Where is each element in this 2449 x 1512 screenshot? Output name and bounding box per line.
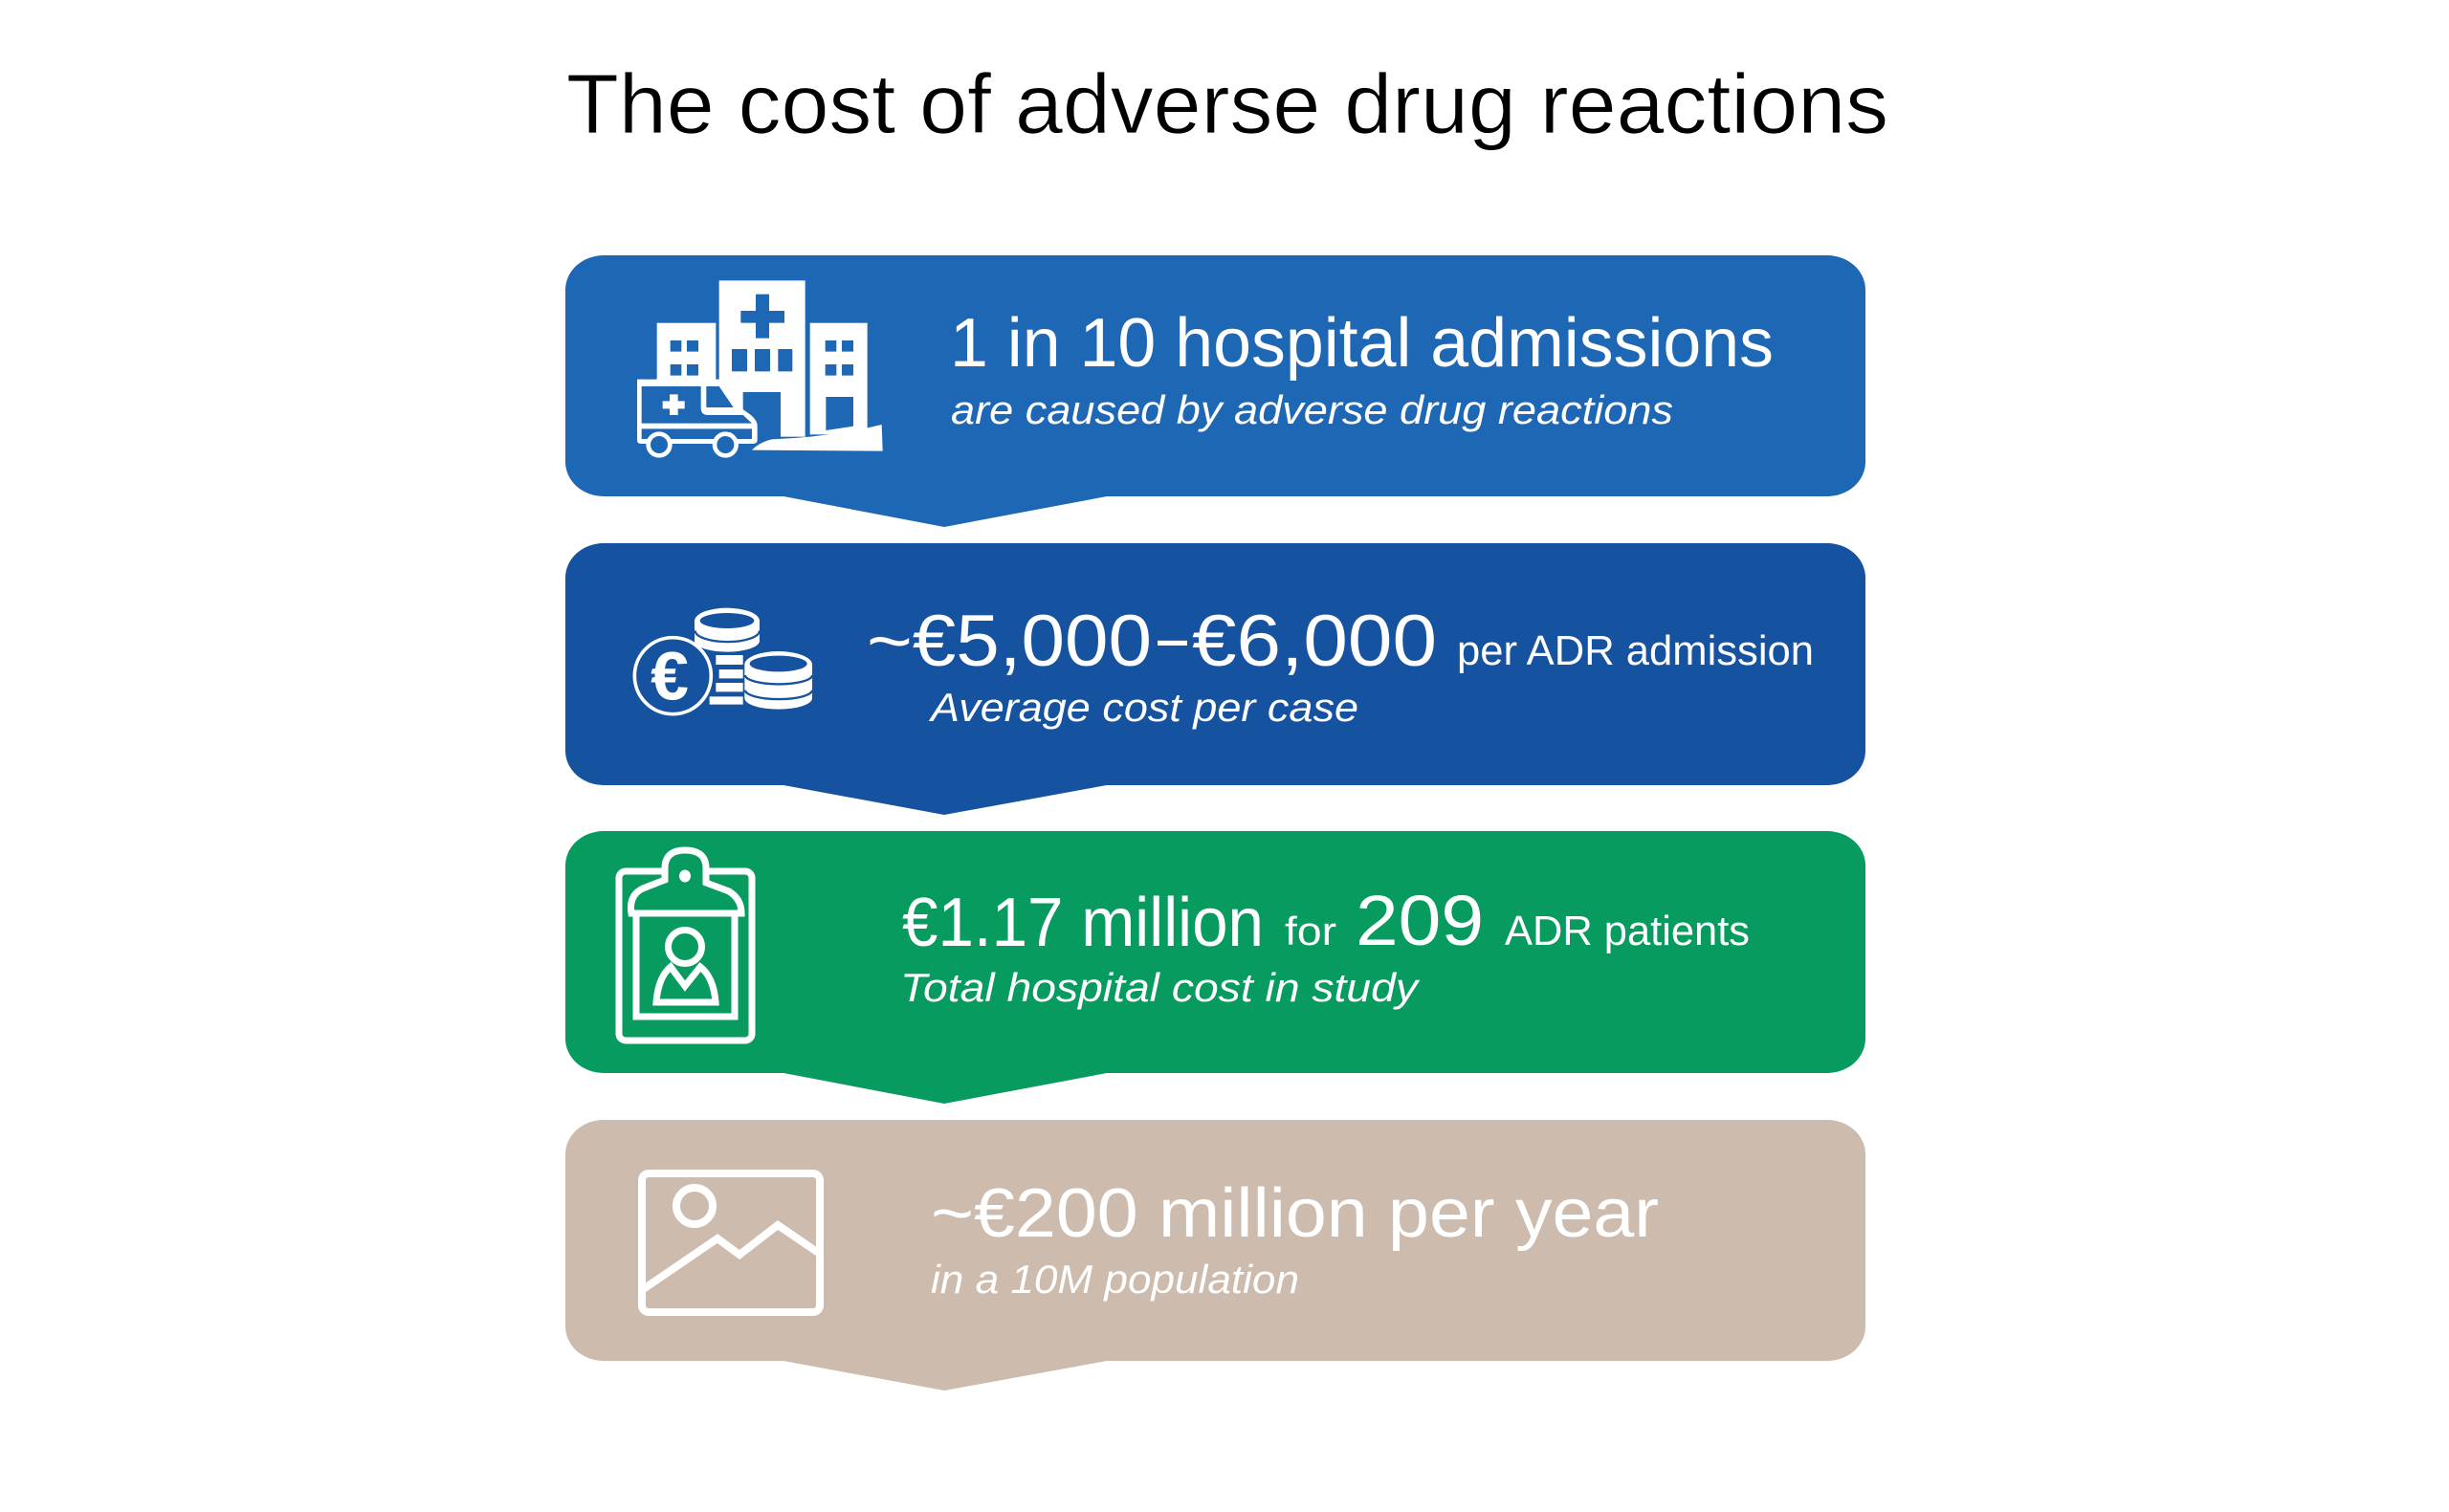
- card shape tan: [565, 1120, 1865, 1391]
- headline: ~€5,000: [867, 601, 1152, 682]
- panel: annual population cost: [565, 1120, 1865, 1391]
- card shape dark blue: [565, 543, 1865, 815]
- connector word: for: [1285, 909, 1336, 953]
- headline unit: per ADR admission: [1457, 627, 1814, 674]
- card shape blue: [565, 255, 1865, 527]
- card shape green: [565, 831, 1865, 1104]
- subtext: Total hospital cost in study: [900, 965, 1421, 1010]
- subtext: Average cost per case: [928, 685, 1358, 730]
- headline: €1.17 million: [902, 885, 1264, 961]
- icon: euro coins: €: [651, 638, 689, 714]
- icon: hospital and ambulance: [637, 280, 883, 455]
- panel: cost per admission: [565, 543, 1865, 815]
- headline: €6,000: [1192, 601, 1437, 682]
- patient count: 209: [1356, 881, 1484, 960]
- panel: hospital admissions: [565, 255, 1865, 527]
- headline: ~€200 million per year: [931, 1175, 1659, 1252]
- headline unit: ADR patients: [1505, 908, 1750, 954]
- headline: [867, 597, 1437, 682]
- icon: euro coins: [634, 608, 812, 714]
- icon: patient clipboard: [619, 850, 752, 1041]
- subtext: in a 10M population: [931, 1257, 1299, 1302]
- icon: image placeholder: [642, 1173, 820, 1312]
- headline: 1 in 10 hospital admissions: [950, 305, 1774, 382]
- headline: –: [1158, 597, 1188, 678]
- subtext: are caused by adverse drug reactions: [951, 387, 1673, 432]
- title: The cost of adverse drug reactions: [566, 56, 1888, 151]
- panel: total study cost: [565, 831, 1865, 1104]
